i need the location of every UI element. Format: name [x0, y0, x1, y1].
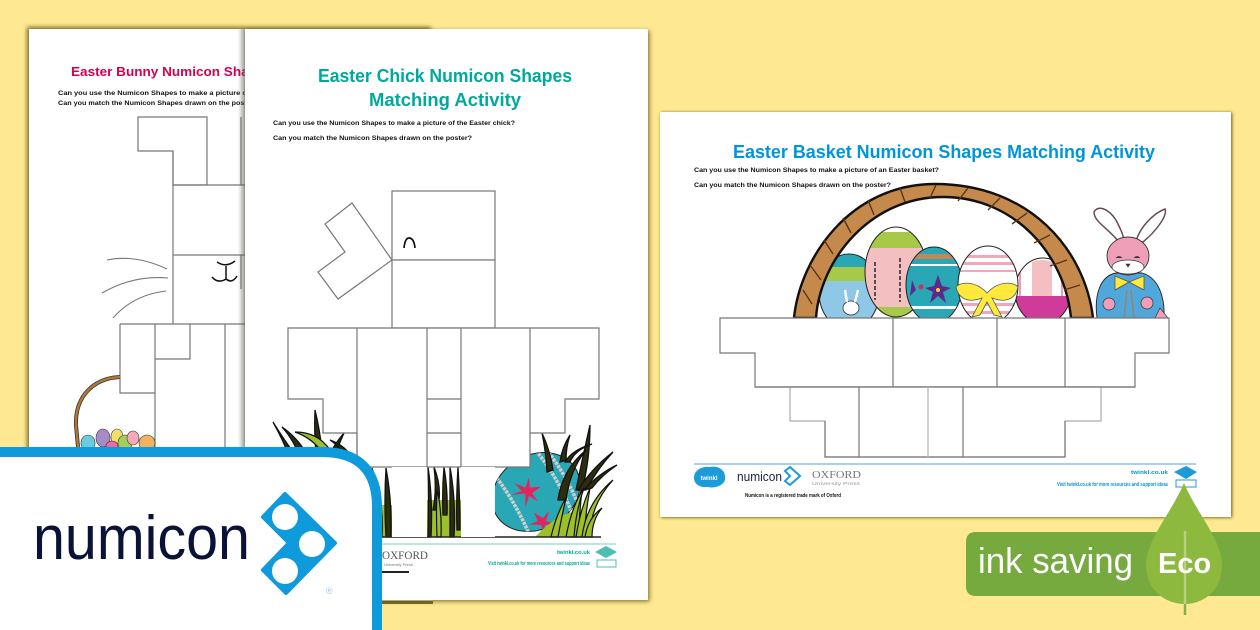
- egg: blue with bunny: [820, 254, 877, 318]
- bunny with bow tie: [1094, 208, 1168, 318]
- panel: Easter chick worksheet: [238, 29, 648, 601]
- small numicon logo: [737, 467, 800, 485]
- rope marks on handle: [803, 185, 1080, 304]
- label: ink saving: ink saving: [978, 540, 1133, 581]
- grass right: [535, 425, 617, 537]
- chick worksheet footer: OXFORD: [382, 548, 428, 562]
- decorated egg: [495, 452, 580, 532]
- whiskers: [102, 258, 168, 318]
- instructions: bunny worksheet: Can you match the Numicon Shapes drawn on the poster?: [58, 101, 258, 107]
- instructions: basket worksheet: Can you use the Numicon Shapes to make a picture of an Easter basket?: [694, 168, 939, 174]
- label: Eco: Eco: [1158, 548, 1211, 580]
- chick wing shape: [318, 203, 392, 299]
- mini basket with eggs: [76, 377, 155, 451]
- egg: pink magenta stripes: [1016, 258, 1068, 318]
- Oxford University Press mark: [812, 469, 861, 486]
- bunny jacket: [1096, 273, 1164, 318]
- chick body shapes: [288, 328, 599, 537]
- grass left: [273, 410, 392, 537]
- chick head and neck shapes: [392, 191, 495, 328]
- egg flowers: [507, 473, 563, 539]
- small numicon logo: numicon: [737, 469, 782, 484]
- chick worksheet footer: [380, 544, 617, 573]
- card: numicon logo: [0, 452, 377, 630]
- bunny ears: [1094, 208, 1165, 242]
- basket handle: [794, 184, 1093, 318]
- basket worksheet footer: Visit twinkl.co.uk for more resources and support ideas: [1057, 482, 1168, 488]
- basket worksheet footer: Numicon is a registered trade mark of Oxford: [745, 493, 841, 499]
- basket worksheet footer: [694, 464, 1197, 499]
- chick worksheet footer: Visit twinkl.co.uk for more resources and support ideas: [488, 561, 590, 567]
- yellow bow: [956, 283, 1018, 317]
- basket outline shapes: [720, 318, 1169, 457]
- Oxford University Press mark: OXFORD: [812, 469, 861, 481]
- instructions: chick worksheet: Can you use the Numicon Shapes to make a picture of the Easter chick?: [273, 121, 515, 127]
- instructions: bunny worksheet: [58, 91, 316, 107]
- registered mark: ®: [326, 586, 333, 596]
- instructions: chick worksheet: Can you match the Numicon Shapes drawn on the poster?: [273, 136, 472, 142]
- ground line: [357, 536, 601, 538]
- bunny outline shapes: [120, 117, 246, 450]
- badge: ink saving Eco: [966, 483, 1260, 615]
- heading: chick worksheet title: Easter Chick Numicon Shapes: [318, 66, 572, 86]
- twinkl logo: [694, 467, 725, 487]
- instructions: basket worksheet: Can you match the Numicon Shapes drawn on the poster?: [694, 183, 891, 189]
- bunny mouth: [212, 261, 237, 281]
- icon: leaf: [1146, 483, 1222, 615]
- heading: bunny worksheet title: Easter Bunny Numicon Shapes: [71, 64, 272, 79]
- basket worksheet footer: twinkl.co.uk: [1131, 470, 1168, 476]
- heading: chick worksheet title: Matching Activity: [369, 90, 521, 110]
- panel: Easter basket worksheet: [660, 112, 1231, 517]
- chick eye: [404, 238, 415, 248]
- icon: numicon shape: [263, 494, 335, 593]
- instructions: basket worksheet: [694, 168, 939, 189]
- wordmark: numicon: [33, 504, 250, 573]
- egg: white with yellow bow: [956, 246, 1018, 318]
- bunny shirt placket: [1124, 290, 1134, 318]
- instructions: chick worksheet: [273, 121, 515, 142]
- heading: basket worksheet title: Easter Basket Numicon Shapes Matching Activity: [733, 142, 1155, 162]
- twinkl logo: twinkl: [700, 476, 718, 482]
- chick worksheet footer: University Press: [384, 562, 413, 567]
- badge bar: [966, 532, 1260, 596]
- Oxford University Press mark: University Press: [812, 481, 861, 486]
- bunny nose and eyes: [1116, 256, 1140, 267]
- bunny hands: [1103, 297, 1168, 318]
- grass middle: [427, 467, 461, 537]
- egg: teal with purple flower: [906, 246, 960, 318]
- bunny head: [1107, 237, 1149, 275]
- panel: Easter bunny worksheet: [29, 29, 433, 604]
- egg: pink and green: [864, 226, 924, 318]
- chick worksheet footer: twinkl.co.uk: [557, 550, 590, 556]
- bunny bow tie: [1115, 276, 1144, 290]
- instructions: bunny worksheet: Can you use the Numicon Shapes to make a picture of the Easter bunny?: [58, 91, 316, 97]
- bunny muzzle: [1112, 260, 1144, 274]
- heading: chick worksheet title: [318, 66, 572, 110]
